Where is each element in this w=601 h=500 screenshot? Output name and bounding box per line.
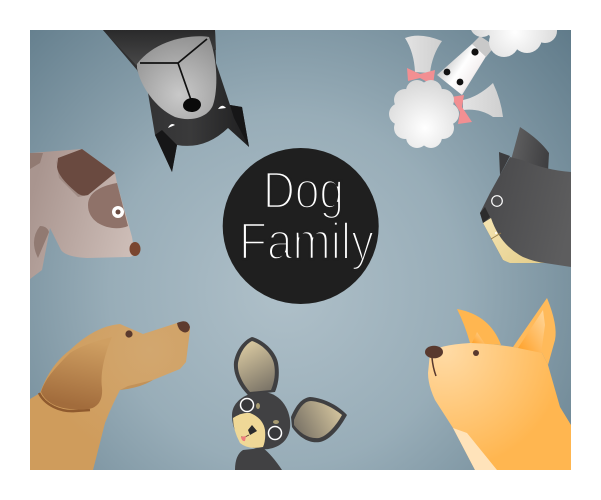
dog: white poodle bbox=[389, 30, 557, 148]
infographic canvas bbox=[30, 30, 571, 470]
dog: chihuahua bbox=[232, 337, 347, 470]
dog: yellow dog bbox=[425, 298, 571, 470]
background panel bbox=[30, 30, 571, 470]
dog: black dog from top bbox=[103, 30, 249, 172]
dog: brown spotted dog bbox=[30, 149, 140, 279]
title text: Dog: Dog bbox=[263, 162, 344, 220]
dog: golden retriever bbox=[30, 321, 190, 470]
title text: Family: Family bbox=[239, 213, 374, 271]
dog: grey dog with cream muzzle bbox=[480, 127, 571, 267]
title badge bbox=[223, 148, 379, 304]
